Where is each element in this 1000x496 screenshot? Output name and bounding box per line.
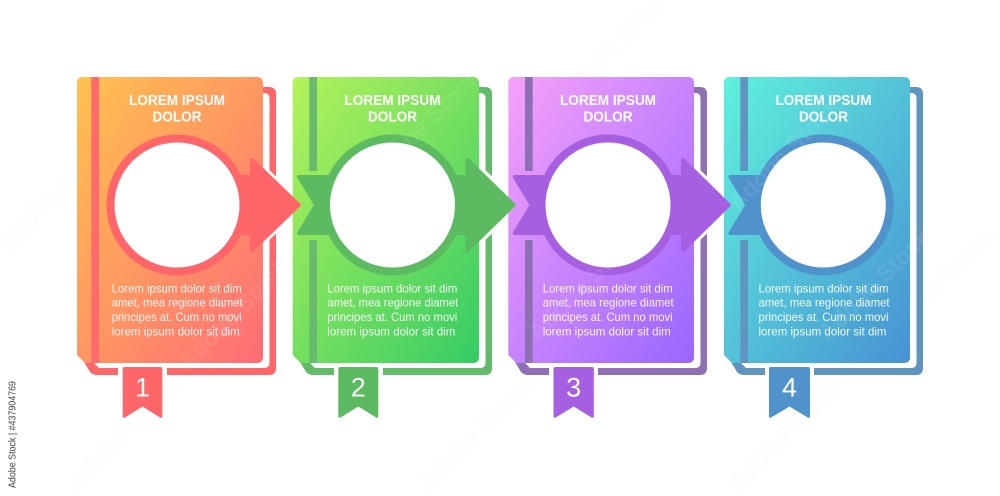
body text 1: principes at. Cum no movi [112,310,242,324]
back cover 1 [84,87,276,375]
arrow halo 1 [263,164,287,246]
watermark: over cards: Adobe Stock [723,93,847,216]
tail 3 [515,177,560,233]
heading 4 [776,93,872,126]
panel: step 4 book [724,77,923,418]
arrow 3 [650,160,729,250]
body text 2: amet, mea regione diamet [327,296,459,310]
heading 1: LOREM IPSUM [129,93,225,109]
back cover 2 [300,87,492,375]
bookmark gap 4 [765,364,814,377]
image circle 2 [326,138,459,272]
spine 1 [91,77,99,363]
book cover 1 [77,77,263,363]
bookmark gap 1 [118,364,167,377]
bookmark gap 2 [334,364,383,377]
body text 2 [327,281,459,338]
book cover 4 [724,77,910,363]
bookmark gap 3 [549,364,598,377]
image circle 3 [542,138,674,272]
bookmark 3: 3 [566,373,581,403]
body text 3: principes at. Cum no movi [543,310,673,324]
arrow 2 [435,160,514,250]
bookmark 1: 1 [135,373,150,403]
heading 2 [344,93,440,126]
watermark: background: Adobe Stock [63,373,187,496]
image circle 4 [757,138,890,272]
back cover 4 [731,87,923,375]
body text 4: principes at. Cum no movi [758,310,888,324]
panel: step 1 book [77,77,299,418]
book cover 2 [293,77,479,363]
body text 3: Lorem ipsum dolor sit dim [543,281,673,295]
body text 4: amet, mea regione diamet [758,296,890,310]
watermark: background: Adobe Stock [413,373,537,496]
heading 4: LOREM IPSUM [776,93,872,109]
watermark: over cards: Adobe Stock [173,253,297,376]
watermark: over cards: Adobe Stock [363,63,487,186]
bookmark 3 [554,367,594,418]
page gap 4 [740,93,916,368]
watermark: background: Adobe Stock [878,223,1000,346]
heading 2: DOLOR [368,110,417,126]
body text 3: lorem ipsum dolor sit dim [543,324,671,338]
heading 2: LOREM IPSUM [344,93,440,109]
body text 4: Lorem ipsum dolor sit dim [758,281,888,295]
arrow halo 2 [479,164,503,246]
body text 3 [543,281,674,338]
image circle 1 [110,138,244,272]
body text 1: Lorem ipsum dolor sit dim [112,281,242,295]
page gap 2 [309,93,486,368]
body text 2: lorem ipsum dolor sit dim [327,324,455,338]
tail 2 [299,177,345,233]
stock id side label: Adobe Stock | #437904769 [6,381,18,488]
heading 1: DOLOR [152,110,202,126]
body text 1: lorem ipsum dolor sit dim [112,324,240,338]
bookmark 4 [769,367,810,418]
heading 3: LOREM IPSUM [560,93,656,109]
panel: step 2 book [293,77,514,418]
body text 1: amet, mea regione diamet [112,296,243,310]
body text 1 [112,281,243,338]
bookmark 2 [338,367,378,418]
heading 3 [560,93,656,126]
bookmark 2: 2 [351,373,366,403]
page gap 3 [524,93,700,368]
body text 4: lorem ipsum dolor sit dim [758,324,886,338]
watermark: over cards: Adobe Stock [523,223,647,346]
page gap 1 [93,93,270,368]
bookmark 4: 4 [782,373,797,403]
bookmark 1 [123,367,162,418]
body text 3: amet, mea regione diamet [543,296,674,310]
book cover 3 [508,77,694,363]
panel: step 3 book [508,77,729,418]
watermark: background: Adobe Stock [723,373,847,496]
spine 2 [309,77,317,363]
heading 3: DOLOR [584,110,633,126]
watermark: over cards: Adobe Stock [813,223,937,346]
body text 4 [758,281,890,338]
tail 4 [730,177,775,233]
back cover 3 [515,87,707,375]
spine 4 [740,77,748,363]
body text 2: principes at. Cum no movi [327,310,457,324]
body text 2: Lorem ipsum dolor sit dim [327,281,457,295]
arrow halo 3 [694,164,718,246]
heading 4: DOLOR [799,110,848,126]
spine 3 [525,77,533,363]
heading 1 [129,93,225,126]
arrow 1 [220,160,299,250]
watermark: over cards [173,63,937,376]
